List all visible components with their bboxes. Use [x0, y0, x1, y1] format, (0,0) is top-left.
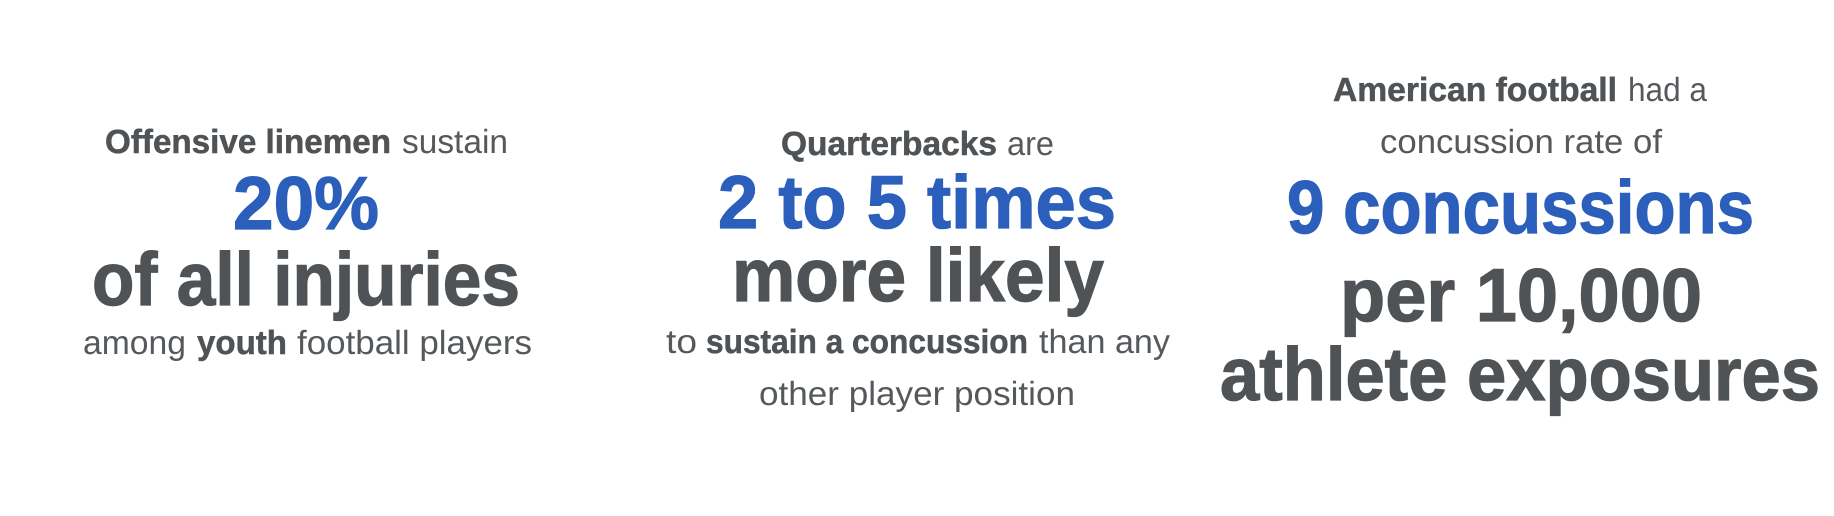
text: offensive linemen sustain: sustain: [402, 124, 508, 161]
panel: offensive linemen statistic: [83, 124, 532, 362]
text: to sustain a concussion than any: sustain a concussion: [706, 324, 1028, 361]
text: concussion rate of: concussion rate of: [1380, 124, 1663, 161]
stat: 20%: 20%: [233, 161, 379, 245]
heading: of all injuries: of all injuries: [92, 237, 520, 321]
stat: 9 concussions: 9 concussions: [1287, 165, 1754, 249]
text: to sustain a concussion than any: than any: [1039, 324, 1170, 361]
text: among youth football players: youth: [197, 325, 287, 362]
stat: 2 to 5 times: 2 to 5 times: [718, 160, 1116, 244]
text: quarterbacks are: are: [1007, 126, 1054, 163]
text: other player position: other player position: [759, 376, 1075, 413]
text: to sustain a concussion than any: to: [666, 324, 697, 361]
heading: more likely: more likely: [732, 233, 1104, 317]
text: among youth football players: football players: [297, 325, 532, 362]
heading: per 10,000: per 10,000: [1340, 253, 1702, 337]
text: to sustain a concussion than any: [666, 324, 1170, 361]
text: among youth football players: [83, 325, 532, 362]
panel: quarterbacks statistic: [666, 126, 1170, 413]
text: american football had a: had a: [1628, 72, 1707, 109]
panel: american football statistic: [1220, 72, 1820, 416]
text: among youth football players: among: [83, 325, 186, 362]
text: american football had a: American football: [1333, 72, 1617, 109]
text: offensive linemen sustain: Offensive linemen: [105, 124, 391, 161]
text: quarterbacks are: Quarterbacks: [781, 126, 997, 163]
